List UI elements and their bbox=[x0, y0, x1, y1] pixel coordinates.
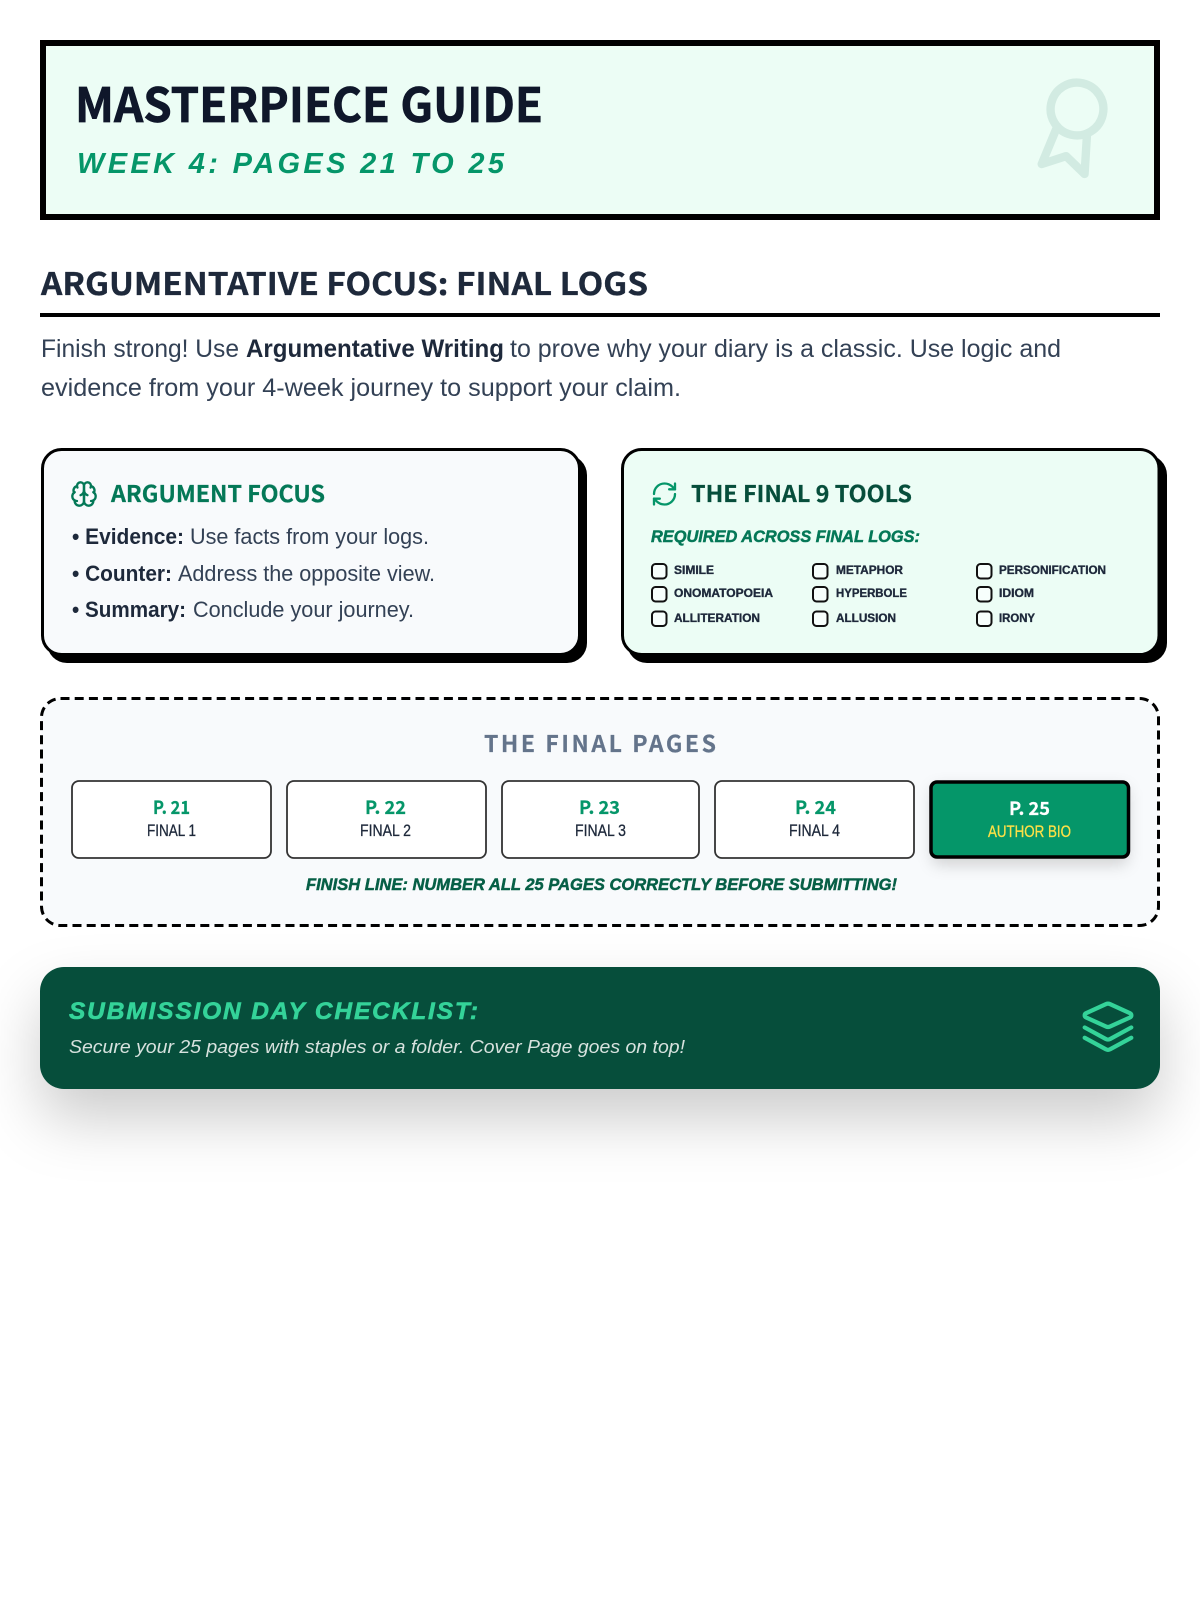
page card: P. 24: P. 24 bbox=[795, 794, 836, 820]
checklist of tools: PERSONIFICATION bbox=[999, 565, 1106, 577]
icon: refresh arrows bbox=[654, 484, 675, 505]
bullet list: • Counter: bbox=[72, 561, 172, 586]
required label: REQUIRED ACROSS FINAL LOGS: bbox=[651, 528, 920, 546]
icon: layers bbox=[1085, 1004, 1131, 1050]
section heading: ARGUMENTATIVE FOCUS: FINAL LOGS bbox=[40, 259, 648, 304]
panel heading: THE FINAL PAGES bbox=[484, 725, 716, 759]
intro paragraph: evidence from your 4-week journey to support your claim. bbox=[41, 374, 681, 402]
page card: P. 25 author bio bbox=[931, 782, 1128, 865]
page card: P. 23: FINAL 3 bbox=[575, 822, 626, 840]
checklist of tools: IDIOM bbox=[999, 588, 1034, 600]
checklist of tools bbox=[652, 564, 1106, 626]
section heading bbox=[40, 259, 1160, 317]
page card: P. 22: FINAL 2 bbox=[360, 822, 411, 840]
page card: P. 21: FINAL 1 bbox=[147, 822, 196, 840]
bullet list: Address the opposite view. bbox=[178, 561, 435, 586]
panel: argument focus bbox=[42, 450, 587, 663]
page card: P. 24 bbox=[715, 781, 914, 858]
intro paragraph: Finish strong! Use bbox=[41, 335, 239, 363]
finish line note: FINISH LINE: NUMBER ALL 25 PAGES CORRECTLY BEFORE SUBMITTING! bbox=[306, 875, 897, 894]
page card: P. 21 bbox=[72, 781, 271, 858]
panel: the final 9 tools bbox=[622, 450, 1167, 663]
checklist of tools: HYPERBOLE bbox=[836, 588, 907, 600]
checklist of tools: METAPHOR bbox=[836, 565, 904, 577]
callout: submission day checklist bbox=[40, 967, 1160, 1119]
callout heading: SUBMISSION DAY CHECKLIST: bbox=[69, 998, 478, 1025]
intro paragraph: to prove why your diary is a classic. Use logic and bbox=[510, 335, 1061, 363]
page card: P. 25 author bio: AUTHOR BIO bbox=[988, 823, 1071, 841]
checklist of tools: ALLITERATION bbox=[674, 613, 760, 625]
bullet list: • Summary: bbox=[72, 597, 186, 622]
intro paragraph bbox=[41, 335, 1061, 402]
bullet list: Conclude your journey. bbox=[193, 597, 414, 622]
checklist of tools: SIMILE bbox=[674, 565, 714, 577]
page card: P. 24: FINAL 4 bbox=[789, 822, 840, 840]
checklist of tools: ALLUSION bbox=[836, 613, 896, 625]
checklist of tools: IRONY bbox=[999, 613, 1035, 625]
subtitle: WEEK 4: PAGES 21 TO 25 bbox=[77, 148, 505, 180]
icon: award ribbon bbox=[1037, 77, 1109, 175]
intro paragraph: Argumentative Writing bbox=[246, 335, 504, 363]
icon: brain bbox=[72, 482, 96, 506]
header banner bbox=[43, 43, 1157, 217]
page card: P. 23 bbox=[502, 781, 699, 858]
page card: P. 21: P. 21 bbox=[153, 794, 190, 820]
bullet list bbox=[72, 524, 435, 622]
page card: P. 22 bbox=[287, 781, 486, 858]
title: MASTERPIECE GUIDE bbox=[75, 67, 543, 136]
checklist of tools: ONOMATOPOEIA bbox=[674, 588, 773, 600]
bullet list: Use facts from your logs. bbox=[190, 524, 429, 549]
card heading: THE FINAL 9 TOOLS bbox=[691, 475, 912, 509]
callout text: Secure your 25 pages with staples or a folder. Cover Page goes on top! bbox=[69, 1036, 685, 1057]
panel: the final pages bbox=[42, 698, 1158, 926]
page card: P. 22: P. 22 bbox=[365, 794, 406, 820]
page card: P. 25 author bio: P. 25 bbox=[1009, 795, 1050, 821]
page card: P. 23: P. 23 bbox=[579, 794, 620, 820]
bullet list: • Evidence: bbox=[72, 524, 184, 549]
card heading: ARGUMENT FOCUS bbox=[110, 475, 325, 509]
